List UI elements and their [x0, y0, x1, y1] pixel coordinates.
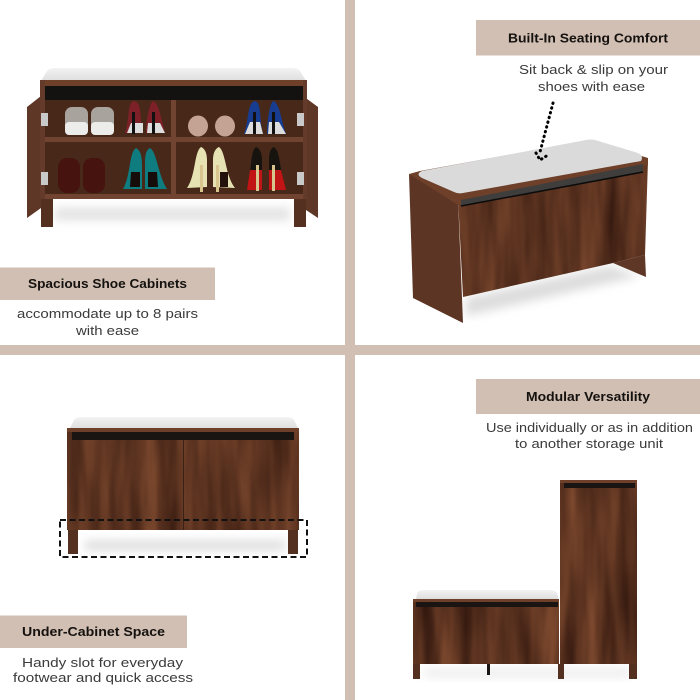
open cabinet with shoes — [27, 68, 318, 227]
heading label — [0, 268, 215, 300]
heading label: Under-Cabinet Space — [22, 624, 165, 639]
floor shadow under bench — [466, 266, 640, 316]
shoes: top shelf — [65, 101, 286, 136]
heading label: Built-In Seating Comfort — [508, 30, 669, 46]
description: with ease — [75, 323, 139, 338]
heading label — [476, 379, 700, 414]
heading label — [476, 20, 700, 56]
shoes: bottom shelf — [58, 147, 286, 193]
description: footwear and quick access — [13, 670, 194, 685]
description: Sit back & slip on your — [519, 62, 669, 77]
floor shadow under open cabinet — [55, 208, 290, 220]
description — [17, 306, 199, 338]
description: shoes with ease — [538, 79, 645, 94]
hinges — [41, 113, 304, 185]
front-facing cabinet — [67, 417, 299, 554]
panel: built-in seating comfort — [409, 20, 700, 323]
description — [486, 420, 693, 451]
floor shadow under cabinet — [85, 541, 285, 550]
description: Handy slot for everyday — [22, 655, 184, 670]
heading label: Modular Versatility — [526, 389, 651, 404]
description — [519, 62, 669, 94]
description: Use individually or as in addition — [486, 420, 693, 435]
heading label: Spacious Shoe Cabinets — [28, 276, 187, 291]
panel: modular versatility — [413, 379, 700, 679]
floor shadow under units — [425, 670, 630, 676]
description — [13, 655, 194, 685]
angled bench — [409, 140, 648, 323]
panel: spacious shoe cabinets — [0, 68, 318, 338]
heading label — [0, 616, 187, 648]
bench unit — [413, 590, 559, 679]
dashed highlight box — [60, 520, 307, 557]
arrow: dotted pointer to seat — [536, 103, 553, 160]
panel: under-cabinet space — [0, 417, 307, 685]
description: accommodate up to 8 pairs — [17, 306, 199, 321]
tall storage unit — [558, 480, 637, 679]
description: to another storage unit — [515, 436, 663, 451]
